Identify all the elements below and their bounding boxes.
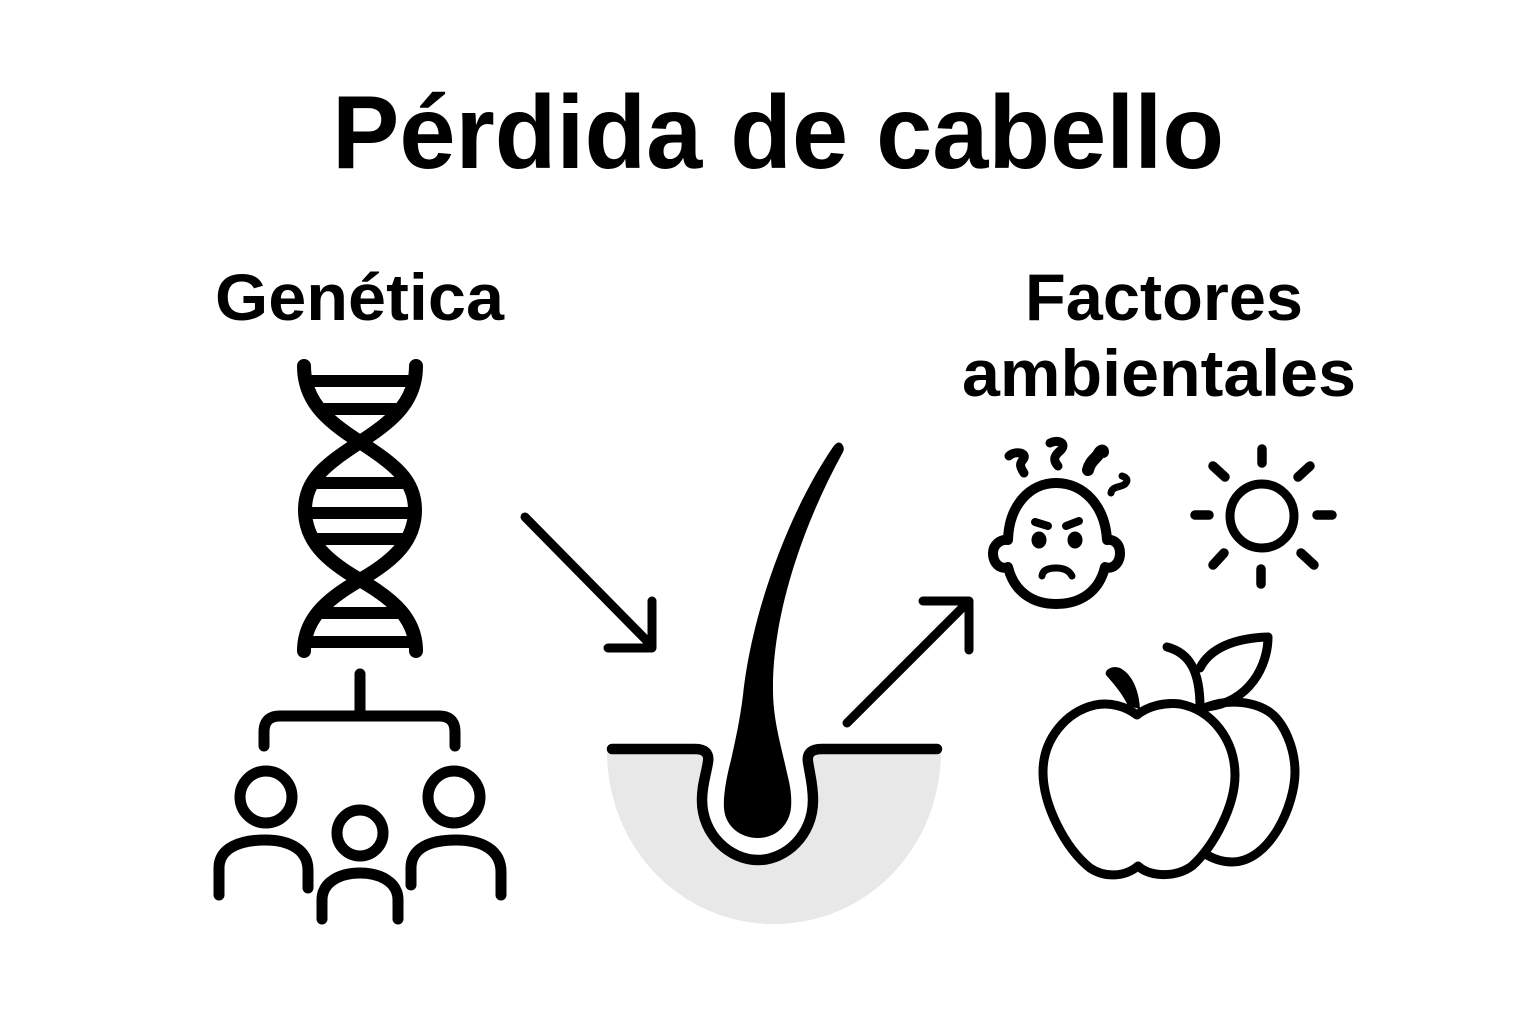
hair shaft [724, 443, 844, 838]
leaf [1200, 637, 1268, 707]
arrow: hair to environmental factors [847, 601, 969, 723]
heading: factores ambientales [962, 260, 1356, 410]
icon: stressed face [993, 441, 1127, 604]
heading: factores ambientales: ambientales [962, 336, 1356, 410]
eyes [1032, 532, 1046, 548]
icon: hair follicle [607, 443, 941, 924]
front apple [1043, 703, 1235, 875]
question marks [1009, 441, 1127, 493]
icon: family tree [219, 674, 501, 919]
back stem [1167, 647, 1200, 707]
mouth [1042, 568, 1072, 576]
heading: genética: Genética [215, 260, 505, 334]
title: Pérdida de cabello [332, 75, 1224, 191]
icon: sun [1195, 449, 1332, 584]
arrow: genetics to hair [525, 517, 652, 648]
icon: DNA helix [304, 366, 416, 651]
head [993, 483, 1120, 604]
heading: factores ambientales: Factores [1025, 260, 1303, 334]
back apple [1207, 702, 1295, 862]
icon: apples [1043, 637, 1295, 875]
front stem [1106, 667, 1140, 709]
brows [1035, 521, 1079, 526]
scalp tissue [607, 750, 941, 924]
follicle [612, 749, 937, 860]
